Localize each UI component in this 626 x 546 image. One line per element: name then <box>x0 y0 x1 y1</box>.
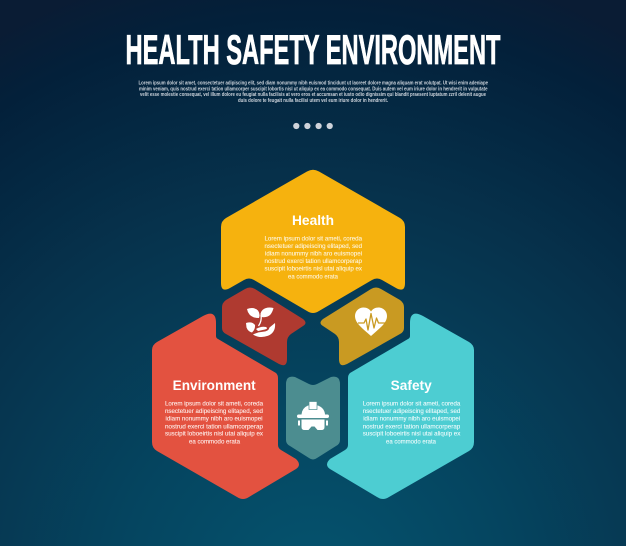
safety text block: Lorem ipsum dolor sit ameti, coreda <box>363 401 461 408</box>
health text block: Lorem ipsum dolor sit ameti, coreda <box>264 236 362 242</box>
intro text block <box>138 81 488 104</box>
pagination dots <box>293 123 333 129</box>
safety text block <box>363 401 461 445</box>
environment text block <box>165 401 264 445</box>
health text block: suscipit loboeirtis nisl utai aliquip ex <box>264 266 363 273</box>
intro text block: velit esse molestie consequat, vel illum dolore eu feugiat nulla facilisis at vero eros et accumsan et iusto odio dignissim qui blandit praesent luptatum zzril delenit augue <box>140 92 486 98</box>
intro text block: Lorem ipsum dolor sit amet, consectetuer adipiscing elit, sed diam nonummy nibh euismod tincidunt ut laoreet dolore magna aliquam erat volutpat. Ut wisi enim adeniape <box>138 81 488 87</box>
intro text block: minim veniam, quis nostrud exerci tation ullamcorper suscipit lobortis nisl ut aliquip ex ea commodo consequat. Duis autem vel eum iriure dolor in hendrerit in vulputate <box>139 86 488 92</box>
environment text block: Lorem ipsum dolor sit ameti, coreda <box>165 401 263 408</box>
panel: environment hexagon <box>152 314 299 499</box>
health text block <box>264 236 363 280</box>
environment text block: nostrud exerci tation ullamcorperap <box>165 423 263 430</box>
health text block: nostrud exerci tation ullamcorperap <box>264 258 362 265</box>
icon: hard hat and goggles <box>297 402 329 430</box>
health heading: Health <box>292 213 334 228</box>
safety text block: idiam nonummy nibh aro euismopei <box>363 416 460 423</box>
panel: health icon tile <box>320 288 404 365</box>
panel: safety hexagon <box>327 314 474 499</box>
environment text block: suscipit loboeirtis nisl utai aliquip ex <box>165 431 264 438</box>
safety heading: Safety <box>391 378 432 393</box>
environment heading: Environment <box>173 378 256 393</box>
health text block: nsectetuer adipeiscing elitaped, sed <box>264 243 362 250</box>
environment text block: idiam nonummy nibh aro euismopei <box>166 416 262 423</box>
panel: health hexagon <box>221 170 405 313</box>
panel: safety icon tile <box>286 377 340 460</box>
icon: plant in hand <box>246 308 275 337</box>
intro text block: duis dolore te feugait nulla facilisi utem vel eum iriure dolor in hendrerit. <box>238 98 388 104</box>
panel: environment icon tile <box>222 288 306 365</box>
environment text block: ea commodo erata <box>189 438 240 445</box>
health text block: idiam nonummy nibh aro euismopei <box>265 251 362 258</box>
safety text block: nsectetuer adipeiscing elitaped, sed <box>363 408 461 415</box>
icon: heart with pulse <box>355 308 387 336</box>
environment text block: nsectetuer adipeiscing elitaped, sed <box>165 408 263 415</box>
health text block: ea commodo erata <box>288 273 338 280</box>
safety text block: ea commodo erata <box>386 438 436 445</box>
safety text block: nostrud exerci tation ullamcorperap <box>363 423 461 430</box>
safety text block: suscipit loboeirtis nisl utai aliquip ex <box>363 431 461 438</box>
